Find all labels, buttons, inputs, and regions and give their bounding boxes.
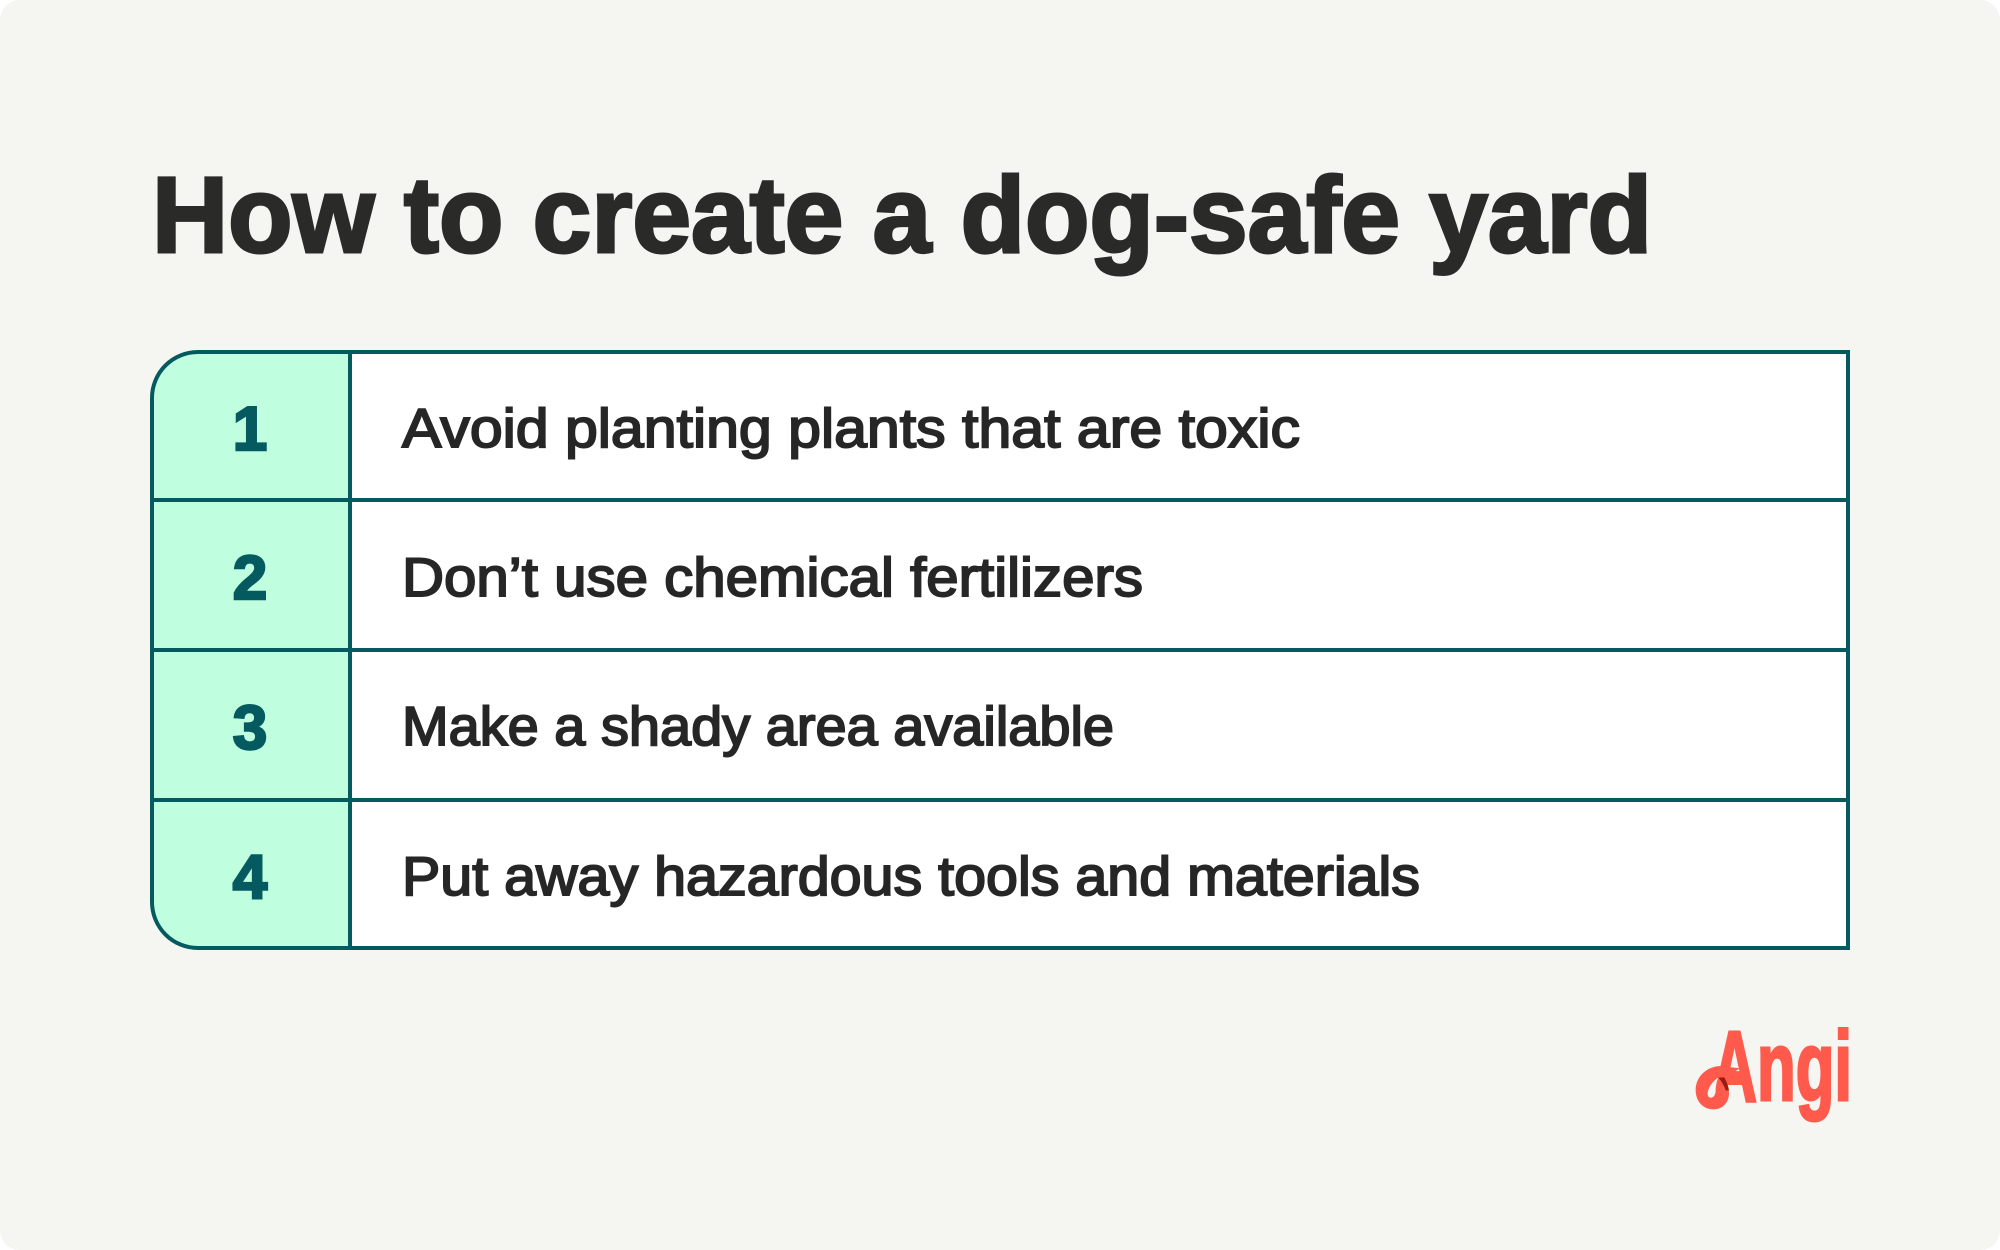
table of steps (152, 352, 1848, 948)
step 2: Don’t use chemical fertilizers (402, 546, 1143, 608)
step 1: 1 (233, 395, 267, 464)
step 2: 2 (233, 544, 267, 613)
step 1: Avoid planting plants that are toxic (402, 397, 1300, 459)
step 4: Put away hazardous tools and materials (402, 845, 1420, 907)
step 2 (233, 544, 1143, 613)
step 3: 3 (233, 694, 267, 763)
Angi logo (1696, 1011, 1852, 1123)
Angi logo: ngi (1757, 1011, 1852, 1121)
step 4: 4 (233, 843, 268, 912)
step 3: Make a shady area available (402, 695, 1114, 757)
Angi logo: A (1712, 1011, 1757, 1123)
title: How to create a dog-safe yard (152, 154, 1652, 275)
